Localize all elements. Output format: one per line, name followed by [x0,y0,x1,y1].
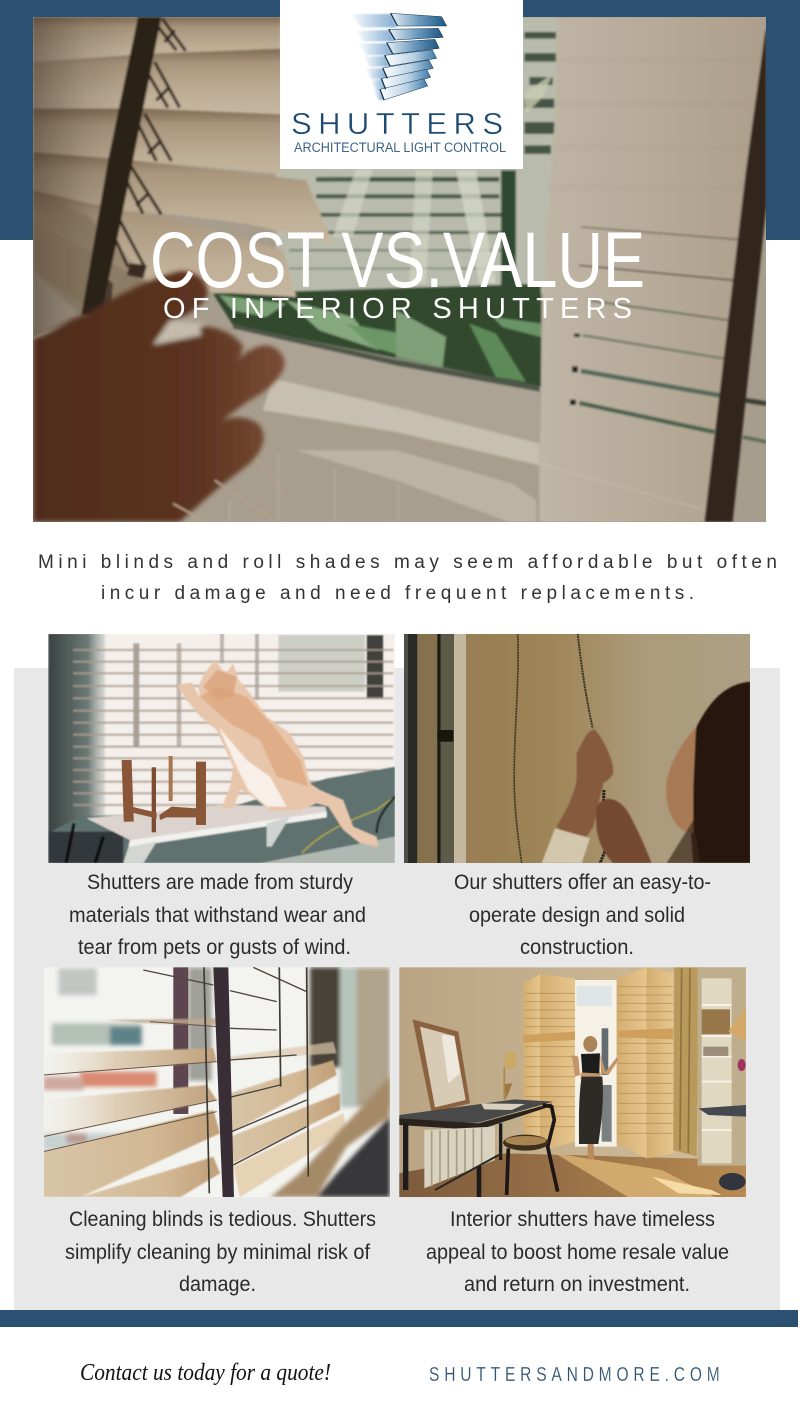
intro text [38,552,777,604]
logo tagline: ARCHITECTURAL LIGHT CONTROL [294,140,506,155]
photo: hands pulling chain [404,633,751,863]
logo wordmark: SHUTTERS [291,106,503,141]
logo mark: stacked shutter slats [349,13,447,100]
subtitle: OF INTERIOR SHUTTERS [163,293,632,325]
footer website: SHUTTERSANDMORE.COM [429,1363,725,1385]
caption: cleaning: damage. [179,1273,256,1296]
intro text: incur damage and need frequent replacements. [101,583,694,604]
caption: sturdy materials: materials that withstand wear and [69,904,366,927]
background band [0,0,800,240]
caption: cleaning [65,1208,376,1296]
footer call to action: Contact us today for a quote! [80,1360,331,1386]
photo: woman opening interior shutters [399,967,746,1197]
right half of hero [173,17,767,522]
caption: resale value [426,1208,729,1296]
hero photo: hand opening blinds [33,17,767,522]
caption: easy to operate: operate design and solid [469,904,685,927]
caption: sturdy materials: Shutters are made from sturdy [87,871,353,894]
photo: close up wooden blinds [43,967,390,1197]
footer bar [0,1310,798,1327]
caption: resale value: appeal to boost home resale value [426,1241,729,1264]
caption: cleaning: Cleaning blinds is tedious. Shutters [69,1208,376,1231]
left half of hero [33,17,353,522]
panel: benefits background [14,668,780,1310]
caption: easy to operate: Our shutters offer an easy-to- [454,871,711,894]
intro text: Mini blinds and roll shades may seem affordable but often [38,552,777,573]
logo box [280,0,523,169]
caption: sturdy materials: tear from pets or gusts of wind. [78,936,351,959]
caption: sturdy materials [69,871,366,959]
caption: cleaning: simplify cleaning by minimal risk of [65,1241,370,1264]
caption: easy to operate: construction. [520,936,634,959]
caption: resale value: Interior shutters have timeless [450,1208,715,1231]
caption: easy to operate [454,871,711,959]
title: COST VS.VALUE [150,215,645,304]
caption: resale value: and return on investment. [464,1273,690,1296]
photo: cat at blinds [48,633,395,863]
